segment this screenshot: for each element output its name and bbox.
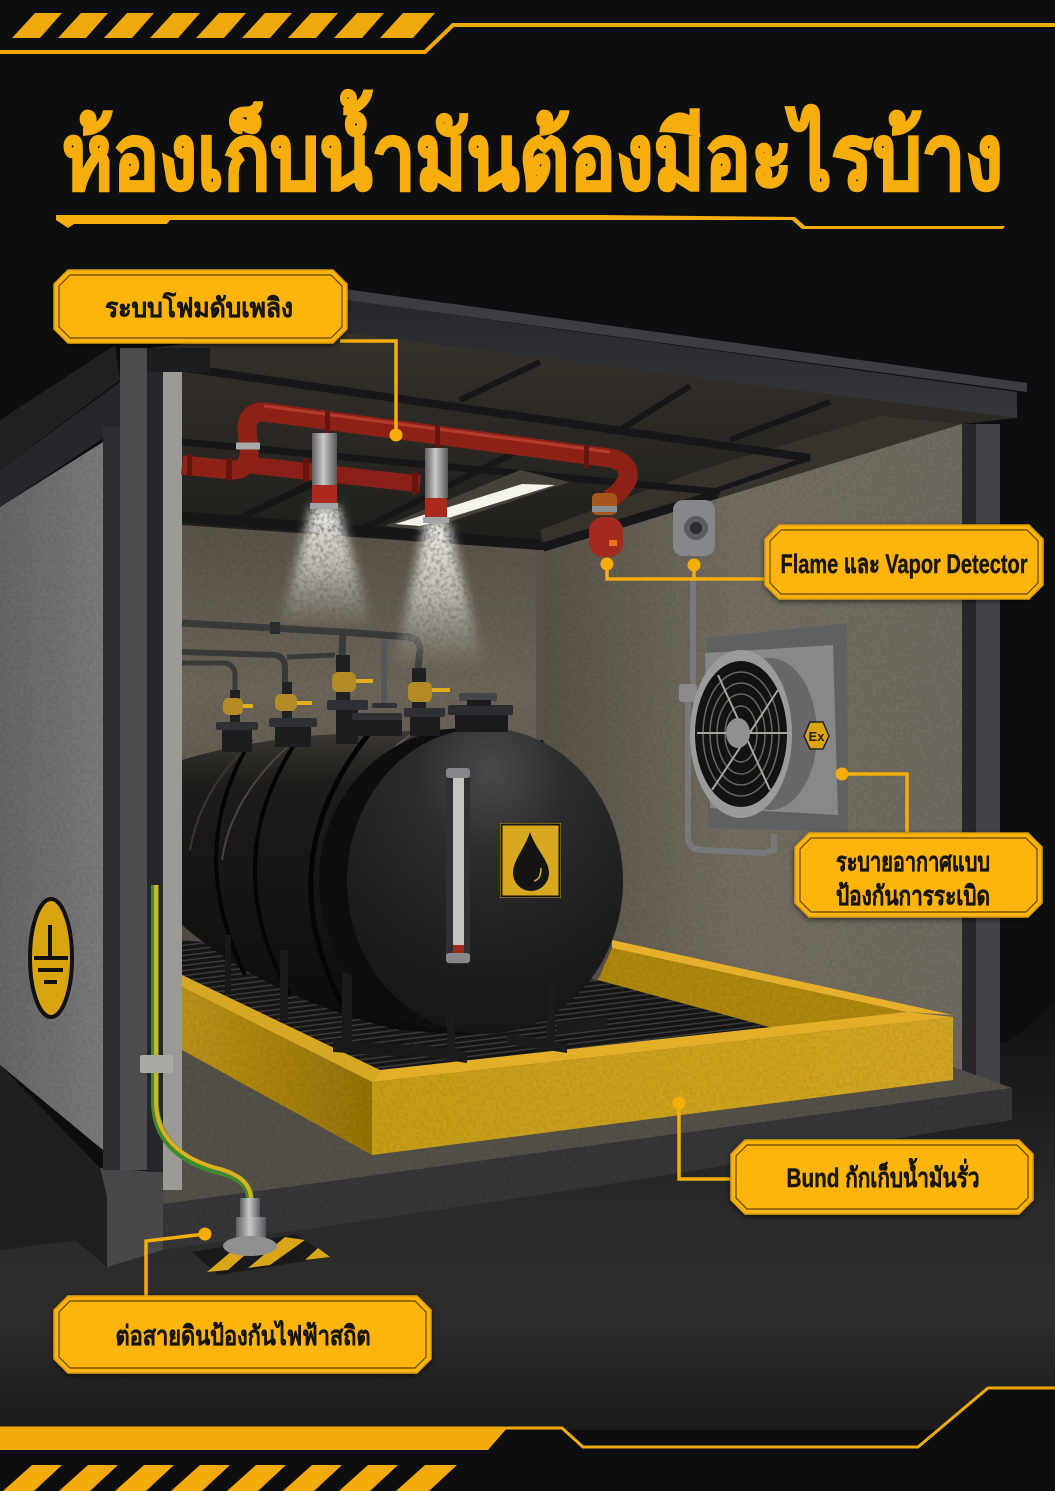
right wall <box>543 424 962 1085</box>
water spray left <box>280 506 372 628</box>
bund left rim <box>182 975 380 1082</box>
sight gauge <box>446 768 470 964</box>
callout dots <box>198 428 848 1240</box>
foam piping <box>182 406 628 500</box>
spill bund <box>182 940 953 1155</box>
nozzle left <box>310 433 338 509</box>
Ex badge: Ex <box>809 729 825 744</box>
tank barrel <box>182 728 470 1035</box>
label: foam system <box>54 270 347 343</box>
explosion-proof fan <box>690 623 848 832</box>
bund front face <box>372 1017 953 1155</box>
label: ventilation: ระบายอากาศแบบ <box>836 847 990 877</box>
cable clamp <box>140 1055 173 1073</box>
label: ventilation <box>795 833 1042 917</box>
bund grating <box>182 940 773 1070</box>
label: grounding: ต่อสายดินป้องกันไฟฟ้าสถิต <box>116 1320 370 1351</box>
label: detector <box>765 525 1043 599</box>
fan hub <box>726 718 750 748</box>
right column <box>962 424 1000 1086</box>
ground floor <box>0 1000 1055 1430</box>
Ex badge <box>804 722 829 749</box>
tank ribs <box>190 728 420 1010</box>
top hazard stripes <box>12 13 435 38</box>
bottom frame dark area <box>0 1388 1055 1491</box>
room floor <box>163 940 1012 1205</box>
wall corner post <box>536 550 544 740</box>
ceiling light housing <box>385 470 570 530</box>
roof top plate <box>345 289 1027 392</box>
oil drop sign <box>500 823 561 898</box>
left column <box>103 348 210 1190</box>
title underline <box>56 215 1005 229</box>
ceiling <box>150 325 1017 550</box>
label: foam system: ระบบโฟมดับเพลิง <box>105 291 293 323</box>
fan ring <box>690 650 792 818</box>
tank end rim <box>319 728 611 1034</box>
back wall <box>182 525 540 995</box>
bund left face <box>182 987 372 1155</box>
red branch <box>250 465 420 484</box>
ground symbol sign <box>30 899 72 1017</box>
pipe collars <box>187 423 589 483</box>
bottom frame line <box>0 1388 1055 1447</box>
fan housing <box>723 658 817 810</box>
fan guard <box>697 672 790 796</box>
tank end cap <box>347 728 623 1034</box>
tank valves <box>216 655 450 752</box>
nozzle right <box>423 448 449 523</box>
label: ventilation: ป้องกันการระเบิด <box>836 881 990 911</box>
callout lines <box>146 341 907 1298</box>
bund back rim <box>612 940 953 1015</box>
ground terminal <box>223 1198 277 1256</box>
grounding cable <box>155 885 251 1200</box>
ground plate <box>192 1234 330 1275</box>
manhole <box>448 693 513 732</box>
label: bund <box>731 1140 1033 1214</box>
front tank legs <box>410 978 607 1063</box>
plinth <box>0 1065 1012 1267</box>
roof beam <box>345 300 1017 418</box>
ceiling ledge <box>540 416 962 552</box>
oil tank <box>182 693 623 1063</box>
bottom band <box>0 1427 508 1450</box>
flame detector <box>589 493 623 557</box>
bund inner back wall <box>598 948 907 1028</box>
bund front rim <box>372 1012 953 1082</box>
bottom hazard stripes <box>3 1465 457 1491</box>
left roof fascia <box>0 345 120 470</box>
pipe clamp <box>236 442 260 450</box>
tank piping <box>182 622 420 705</box>
pipe highlight <box>264 406 610 452</box>
conduit <box>679 580 774 853</box>
storage room scene <box>0 289 1027 1275</box>
ceiling light <box>395 484 555 526</box>
vapor detector <box>673 500 715 556</box>
red main <box>182 412 628 500</box>
ceiling beams <box>182 362 830 548</box>
label: grounding <box>54 1296 431 1373</box>
mount plate <box>707 623 848 832</box>
water spray right <box>394 521 484 668</box>
top frame line <box>0 25 1055 52</box>
tank legs <box>225 935 410 1057</box>
left wall panel <box>0 442 103 1150</box>
label: bund: Bund กักเก็บน้ำมันรั่ว <box>786 1157 980 1193</box>
